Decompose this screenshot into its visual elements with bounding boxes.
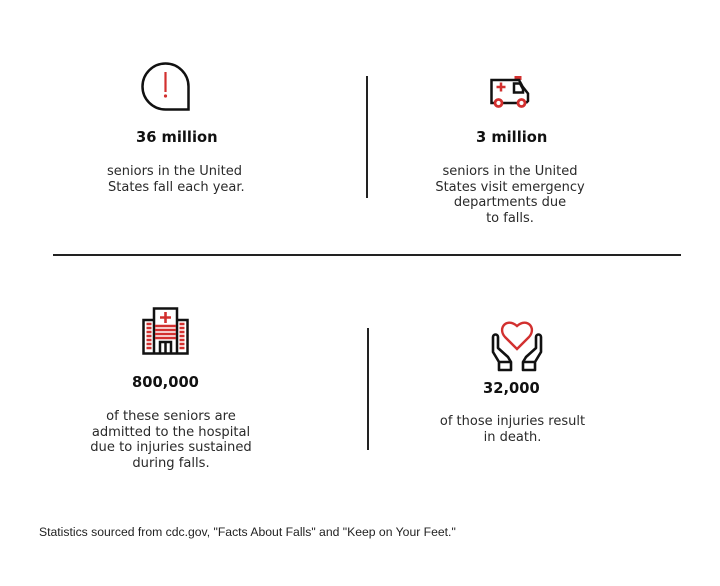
divider: bottom vertical <box>367 328 369 450</box>
footer: sources: Statistics sourced from cdc.gov, "Facts About Falls" and "Keep on Your Feet." <box>39 525 456 539</box>
heading: 3 million: 3 million <box>476 129 547 146</box>
panel: 3 million <box>435 129 585 226</box>
icon: ambulance <box>490 76 530 108</box>
divider: top vertical <box>366 76 368 198</box>
heading: 36 million: 36 million <box>136 129 218 146</box>
panel: 36 million <box>107 129 245 195</box>
panel: 800,000 <box>90 374 252 471</box>
icon: hospital <box>142 307 189 355</box>
description: emergency visits: departments due <box>454 195 566 210</box>
description: hospital admissions <box>90 409 252 471</box>
description: hospital admissions: admitted to the hospital <box>92 425 250 440</box>
icon: alert speech bubble <box>141 62 190 111</box>
divider: horizontal <box>53 254 681 256</box>
icon: hands holding heart <box>492 322 542 372</box>
description: emergency visits: States visit emergency <box>435 180 585 195</box>
description: hospital admissions: during falls. <box>132 456 210 471</box>
heading: 800,000: 800,000 <box>132 374 199 391</box>
description: deaths <box>440 414 585 445</box>
description: hospital admissions: of these seniors are <box>106 409 236 424</box>
description: emergency visits: seniors in the United <box>442 164 578 179</box>
panel: 32,000 <box>440 380 585 445</box>
description: deaths: of those injuries result <box>440 414 585 429</box>
description: seniors fall: seniors in the United <box>107 164 242 179</box>
description: emergency visits: to falls. <box>486 211 534 226</box>
description: hospital admissions: due to injuries sustained <box>90 440 252 455</box>
description: seniors fall <box>107 164 245 195</box>
description: seniors fall: States fall each year. <box>108 180 245 195</box>
description: deaths: in death. <box>484 430 541 445</box>
heading: 32,000: 32,000 <box>483 380 540 397</box>
description: emergency visits <box>435 164 585 226</box>
